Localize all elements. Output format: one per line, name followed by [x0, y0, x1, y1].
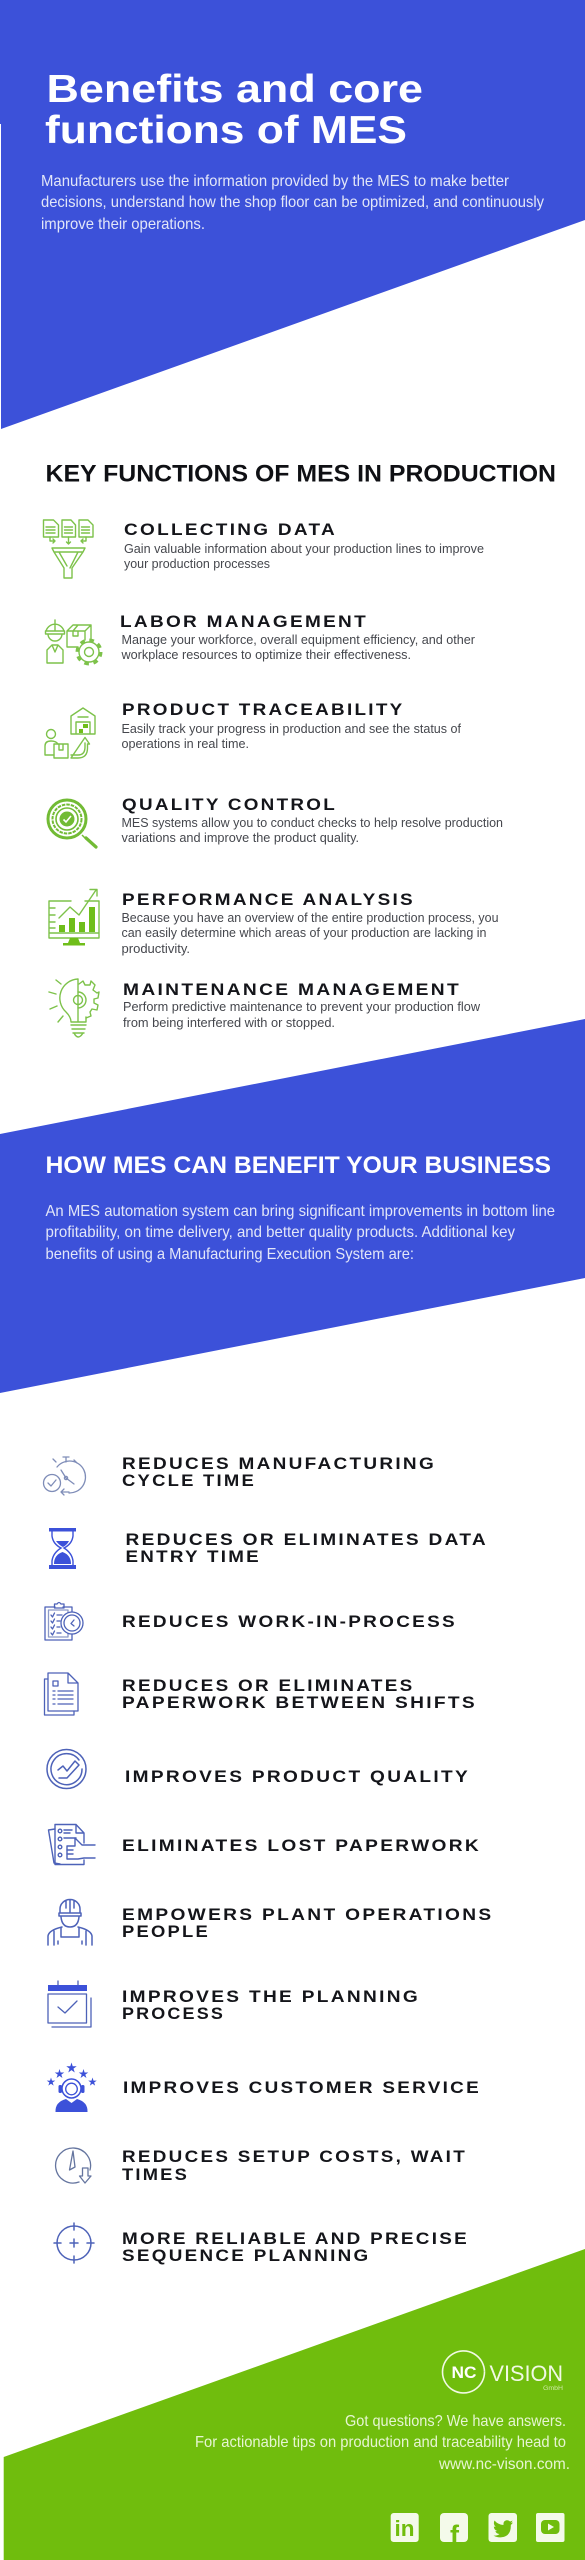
- description: operations in real time.: [122, 736, 249, 751]
- function: quality control: [48, 796, 503, 847]
- footer background: [4, 2249, 585, 2560]
- paragraph: [46, 1203, 555, 1263]
- icon: calendar with check: [48, 1981, 91, 2027]
- icon: worker with helmet: [48, 1900, 92, 1945]
- label: [122, 2148, 467, 2184]
- panel: header: [0, 0, 585, 429]
- label: PROCESS: [122, 2005, 225, 2023]
- icon: documents: [44, 1673, 78, 1715]
- label: [126, 1531, 488, 1566]
- label: EMPOWERS PLANT OPERATIONS: [122, 1906, 494, 1924]
- logo: NC Vision: GmbH: [543, 2386, 563, 2392]
- description: productivity.: [122, 941, 190, 956]
- description: Because you have an overview of the entire production process, you: [122, 910, 498, 925]
- description: MES systems allow you to conduct checks to help resolve production: [122, 815, 503, 830]
- function: maintenance management: [49, 979, 480, 1037]
- description: Perform predictive maintenance to prevent your production flow: [123, 999, 480, 1014]
- icon: LinkedIn: in: [394, 2516, 414, 2541]
- benefit: lost paperwork: [48, 1824, 481, 1864]
- label: TIMES: [122, 2166, 189, 2184]
- contact text: [195, 2413, 570, 2473]
- label: MORE RELIABLE AND PRECISE: [122, 2230, 469, 2248]
- title: [45, 68, 423, 152]
- description: [124, 541, 484, 571]
- intro text: decisions, understand how the shop floor can be optimized, and continuously: [41, 194, 544, 211]
- description: Manage your workforce, overall equipment efficiency, and other: [122, 632, 476, 647]
- intro text: [41, 173, 544, 233]
- contact text: Got questions? We have answers.: [345, 2413, 566, 2430]
- logo: NC Vision: [443, 2351, 563, 2393]
- label: [122, 1455, 436, 1490]
- heading: HOW MES CAN BENEFIT YOUR BUSINESS: [46, 1152, 551, 1179]
- icon: agent with stars: [47, 2062, 97, 2112]
- label: SEQUENCE PLANNING: [122, 2247, 370, 2265]
- icon: Facebook: [440, 2513, 468, 2550]
- heading: PRODUCT TRACEABILITY: [122, 701, 404, 719]
- heading: PERFORMANCE ANALYSIS: [122, 891, 415, 909]
- icon: LinkedIn: [391, 2513, 419, 2542]
- icon: hourglass: [49, 1528, 76, 1569]
- icon: Facebook: f: [450, 2520, 460, 2550]
- benefit: cycle time: [44, 1455, 436, 1495]
- icon: papers with thumbs up: [48, 1824, 95, 1864]
- benefit: setup costs: [56, 2148, 467, 2184]
- title: Benefits and core: [46, 68, 423, 111]
- benefit: product quality: [47, 1750, 470, 1788]
- heading: QUALITY CONTROL: [122, 796, 337, 814]
- label: REDUCES OR ELIMINATES: [122, 1677, 414, 1695]
- intro text: improve their operations.: [41, 216, 205, 233]
- icon: check badge: [47, 1750, 86, 1788]
- benefit: sequence planning: [54, 2223, 469, 2265]
- label: ELIMINATES LOST PAPERWORK: [122, 1837, 481, 1855]
- description: [122, 721, 461, 751]
- description: [122, 910, 498, 956]
- label: PEOPLE: [122, 1923, 210, 1941]
- description: Easily track your progress in production and see the status of: [122, 721, 461, 736]
- description: workplace resources to optimize their effectiveness.: [121, 647, 411, 662]
- icon: warehouse, person and arrow: [45, 708, 95, 758]
- description: [123, 999, 480, 1030]
- title: functions of MES: [45, 109, 407, 152]
- paragraph: profitability, on time delivery, and better quality products. Additional key: [46, 1224, 515, 1241]
- icon: magnifier with check: [48, 800, 96, 847]
- description: from being interfered with or stopped.: [123, 1015, 335, 1030]
- icon: worker, box and gear: [46, 620, 101, 664]
- icon: light bulb with gear: [49, 979, 99, 1037]
- description: your production processes: [124, 556, 270, 571]
- label: CYCLE TIME: [122, 1472, 256, 1490]
- label: [122, 1988, 420, 2023]
- benefit: data entry time: [49, 1528, 488, 1569]
- label: PAPERWORK BETWEEN SHIFTS: [122, 1694, 477, 1712]
- description: variations and improve the product quality.: [122, 830, 359, 845]
- logo: NC Vision: NC: [452, 2363, 476, 2382]
- icon: stopwatch cycle: [44, 1457, 85, 1495]
- paragraph: benefits of using a Manufacturing Execution System are:: [46, 1246, 414, 1263]
- label: REDUCES WORK-IN-PROCESS: [122, 1613, 457, 1631]
- intro text: Manufacturers use the information provided by the MES to make better: [41, 173, 509, 190]
- icon: monitor with rising chart: [49, 890, 99, 946]
- description: [121, 632, 476, 662]
- icon: crosshair target: [54, 2223, 94, 2263]
- icon: Twitter: [488, 2513, 517, 2542]
- panel: footer: [4, 2249, 585, 2560]
- label: [122, 2230, 469, 2265]
- description: Gain valuable information about your production lines to improve: [124, 541, 484, 556]
- description: can easily determine which areas of your production are lacking in: [122, 925, 486, 940]
- benefit: planning process: [48, 1981, 420, 2027]
- paragraph: An MES automation system can bring significant improvements in bottom line: [46, 1203, 555, 1220]
- label: REDUCES SETUP COSTS, WAIT: [122, 2148, 467, 2166]
- label: ENTRY TIME: [126, 1548, 261, 1566]
- heading: LABOR MANAGEMENT: [120, 613, 368, 631]
- icon: documents into funnel: [44, 520, 93, 578]
- header background: [0, 0, 585, 429]
- label: IMPROVES THE PLANNING: [122, 1988, 420, 2006]
- function: collecting data: [44, 520, 484, 578]
- function: product traceability: [45, 701, 461, 758]
- icon: clock with down arrow: [56, 2148, 91, 2183]
- function: labor management: [46, 613, 476, 664]
- benefit: plant operations people: [48, 1900, 494, 1945]
- label: IMPROVES CUSTOMER SERVICE: [123, 2079, 481, 2097]
- contact text: www.nc-vison.com.: [438, 2456, 570, 2473]
- label: REDUCES MANUFACTURING: [122, 1455, 436, 1473]
- benefit: customer service: [47, 2062, 481, 2112]
- label: IMPROVES PRODUCT QUALITY: [125, 1768, 470, 1786]
- icon: YouTube: [536, 2513, 564, 2542]
- logo: NC Vision: VISION: [490, 2361, 563, 2386]
- benefit: paperwork between shifts: [44, 1673, 477, 1715]
- heading: MAINTENANCE MANAGEMENT: [123, 981, 461, 999]
- heading: COLLECTING DATA: [124, 521, 337, 539]
- benefit: work-in-process: [45, 1602, 457, 1640]
- icon: clipboard with clock: [45, 1602, 83, 1640]
- heading: key functions: KEY FUNCTIONS OF MES IN PRODUCTION: [46, 460, 556, 488]
- label: [122, 1906, 494, 1941]
- function: performance analysis: [49, 890, 498, 956]
- label: [122, 1677, 477, 1712]
- label: REDUCES OR ELIMINATES DATA: [126, 1531, 488, 1549]
- contact text: For actionable tips on production and traceability head to: [195, 2434, 566, 2451]
- panel background: [0, 1019, 585, 1393]
- description: [122, 815, 503, 845]
- panel: how MES benefits: [0, 1019, 585, 1393]
